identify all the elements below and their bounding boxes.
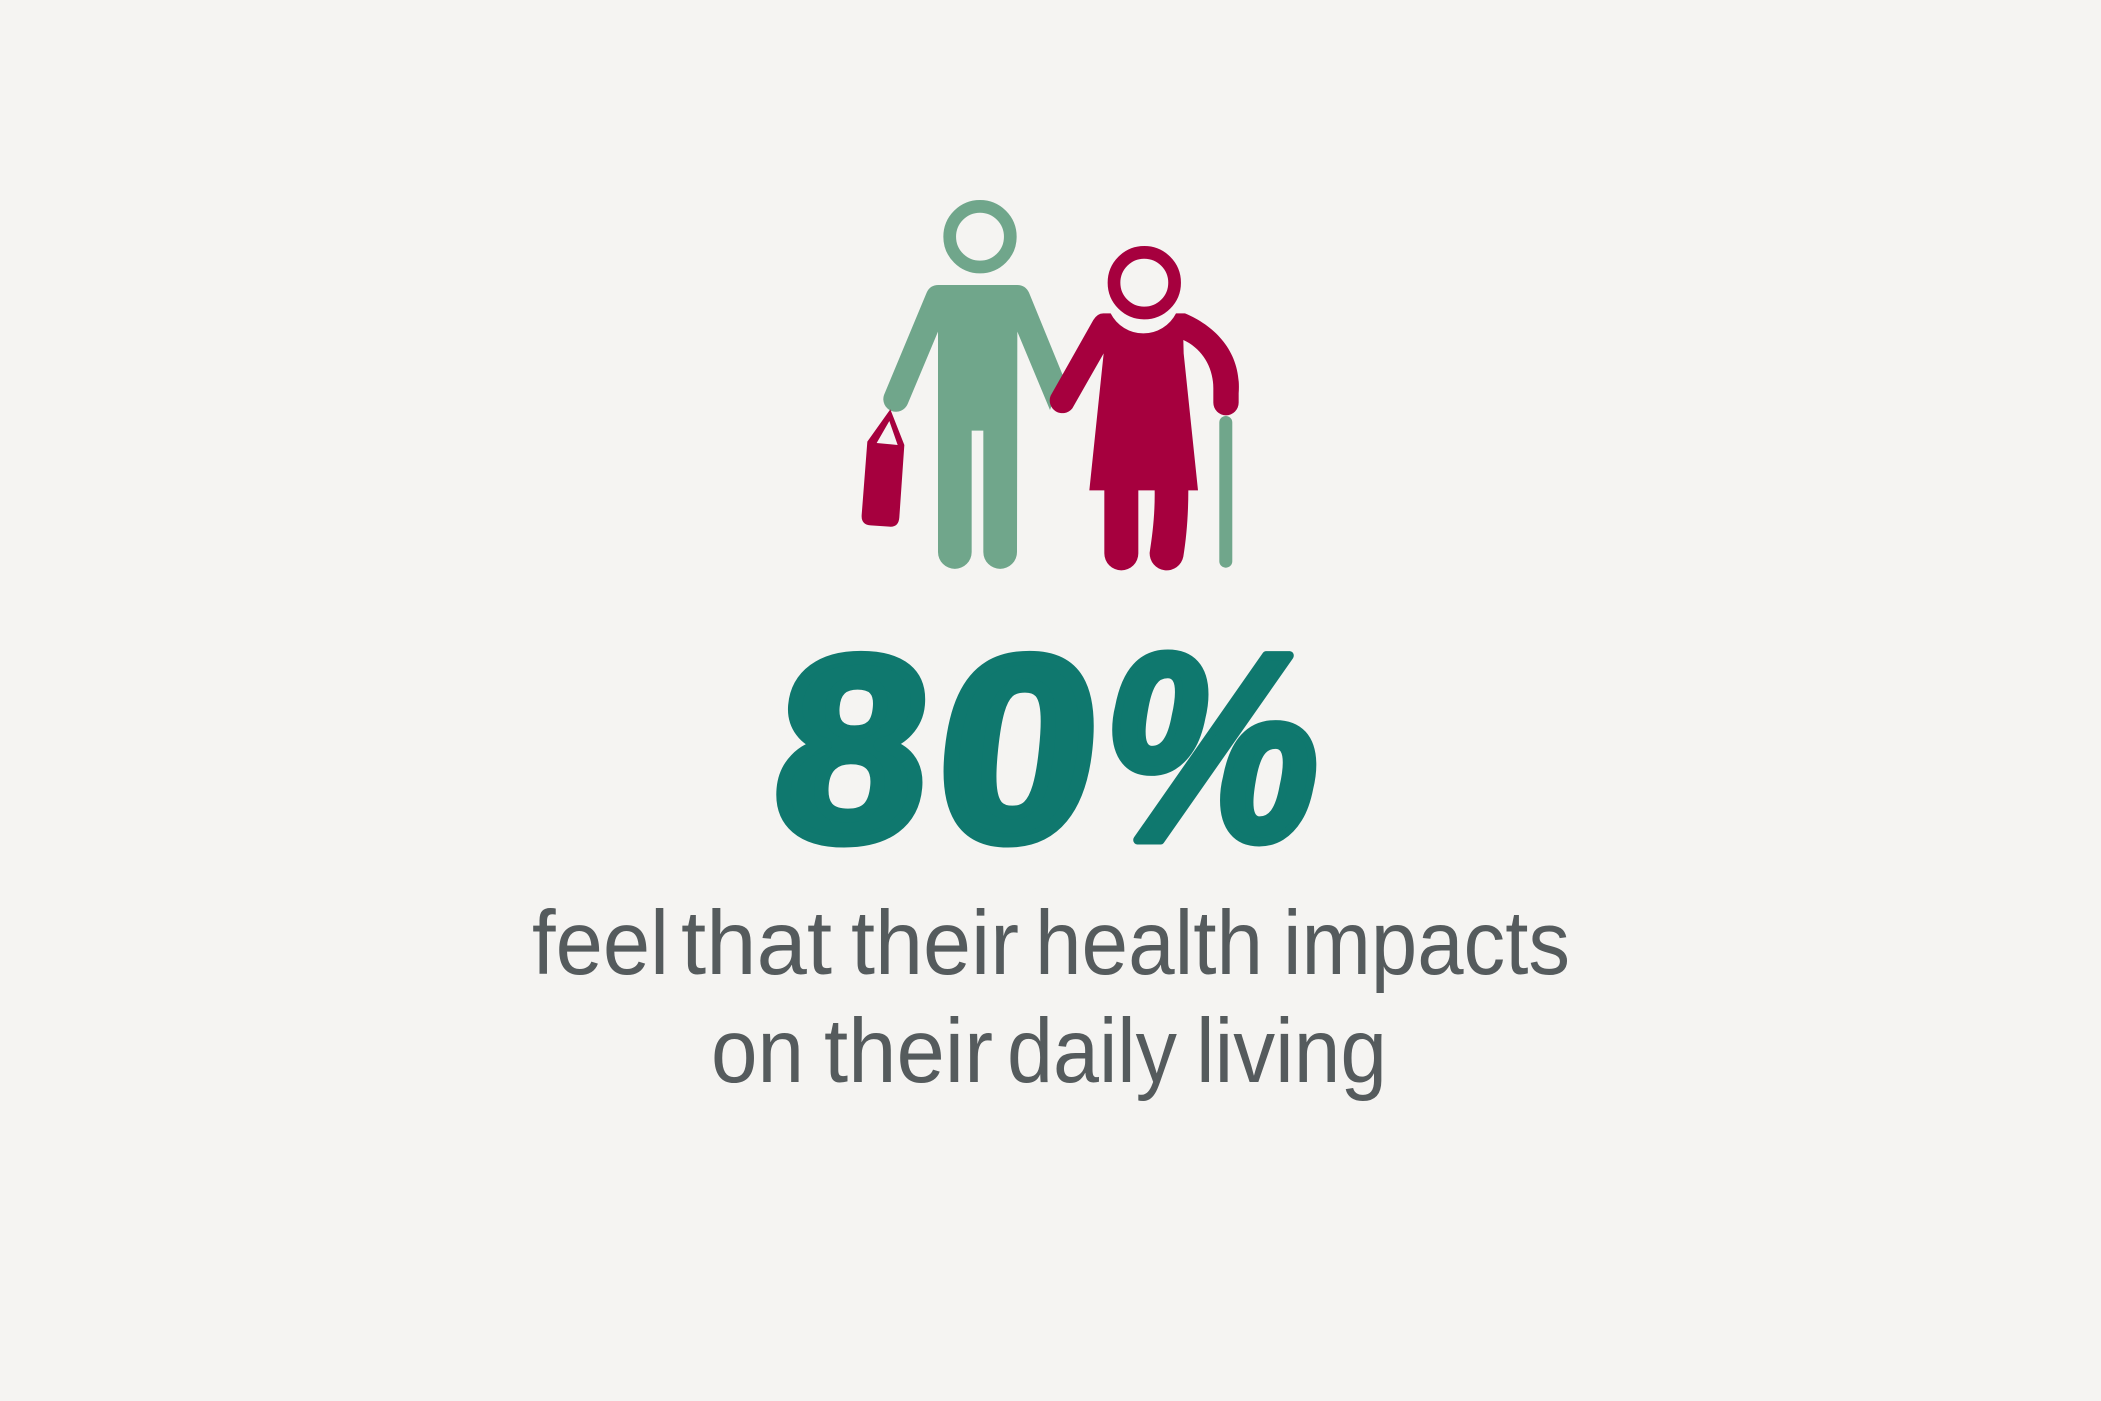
- caption text: that: [681, 893, 832, 994]
- caption text: feel: [532, 893, 669, 994]
- icon: two people: [862, 206, 1239, 570]
- icon: woman figure: [1050, 252, 1239, 570]
- big statistic: 80%: %: [1103, 597, 1319, 897]
- caption text: their: [824, 1001, 993, 1102]
- icon: man figure: [883, 206, 1063, 569]
- caption text: impacts: [1283, 893, 1570, 994]
- caption text: health: [1035, 893, 1263, 994]
- big statistic: 80%: 8: [766, 604, 939, 893]
- caption text: their: [851, 893, 1019, 994]
- caption text: daily: [1007, 1001, 1177, 1102]
- big statistic: 80%: 0: [926, 605, 1111, 894]
- caption text: on: [711, 1001, 804, 1102]
- big statistic: 80%: [766, 597, 1319, 897]
- icon: walking cane: [1219, 416, 1232, 568]
- caption text: living: [1196, 1001, 1387, 1102]
- caption text: [532, 893, 1570, 1102]
- icon: shopping bag: [862, 409, 904, 527]
